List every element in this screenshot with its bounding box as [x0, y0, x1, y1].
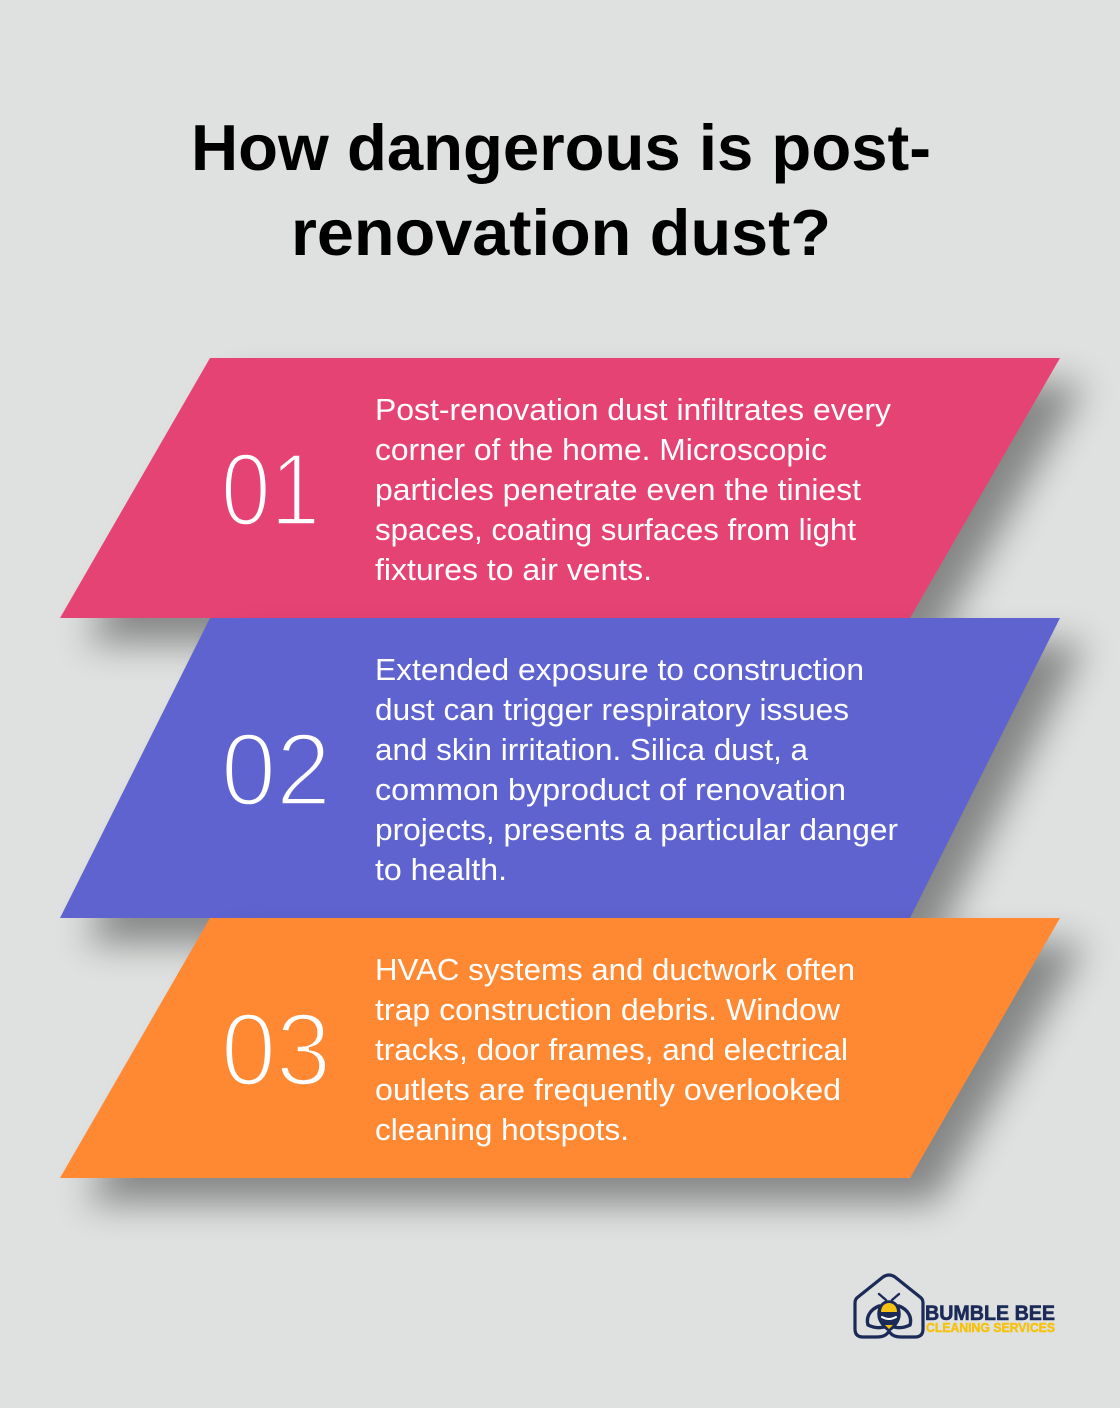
panel: step 03 [60, 918, 1085, 1203]
title: renovation dust? [291, 196, 831, 269]
text: step 01: particles penetrate even the tiniest [375, 472, 861, 507]
text: step 01: fixtures to air vents. [375, 552, 652, 587]
text: step 02: projects, presents a particular danger [375, 812, 898, 847]
text: step 03: outlets are frequently overlooked [375, 1072, 841, 1107]
number 02: 02 [221, 712, 331, 827]
text: step 02: to health. [375, 852, 507, 887]
logo tagline: CLEANING SERVICES [926, 1321, 1055, 1335]
text: step 01: spaces, coating surfaces from light [375, 512, 856, 547]
text: step 02: common byproduct of renovation [375, 772, 846, 807]
text: step 02 [375, 652, 898, 887]
panel: step 01 [60, 358, 1085, 643]
text: step 03: trap construction debris. Window [375, 992, 841, 1027]
text: step 02: Extended exposure to construction [375, 652, 864, 687]
icon: house with bee [855, 1275, 923, 1337]
logo text: BUMBLE BEE [925, 1302, 1055, 1325]
text: step 03 [375, 952, 855, 1147]
logo: Bumble Bee Cleaning Services [855, 1275, 1055, 1337]
text: step 01: Post-renovation dust infiltrates every [375, 392, 892, 427]
title: How dangerous is post- [191, 111, 931, 184]
panel: step 02 [60, 618, 1085, 943]
number 03: 03 [221, 992, 331, 1107]
title [191, 111, 931, 269]
text: step 02: dust can trigger respiratory issues [375, 692, 849, 727]
text: step 01 [375, 392, 892, 587]
text: step 02: and skin irritation. Silica dust, a [375, 732, 809, 767]
text: step 01: corner of the home. Microscopic [375, 432, 827, 467]
text: step 03: tracks, door frames, and electrical [375, 1032, 848, 1067]
number 01: 01 [221, 432, 320, 547]
text: step 03: HVAC systems and ductwork often [375, 952, 855, 987]
text: step 03: cleaning hotspots. [375, 1112, 629, 1147]
